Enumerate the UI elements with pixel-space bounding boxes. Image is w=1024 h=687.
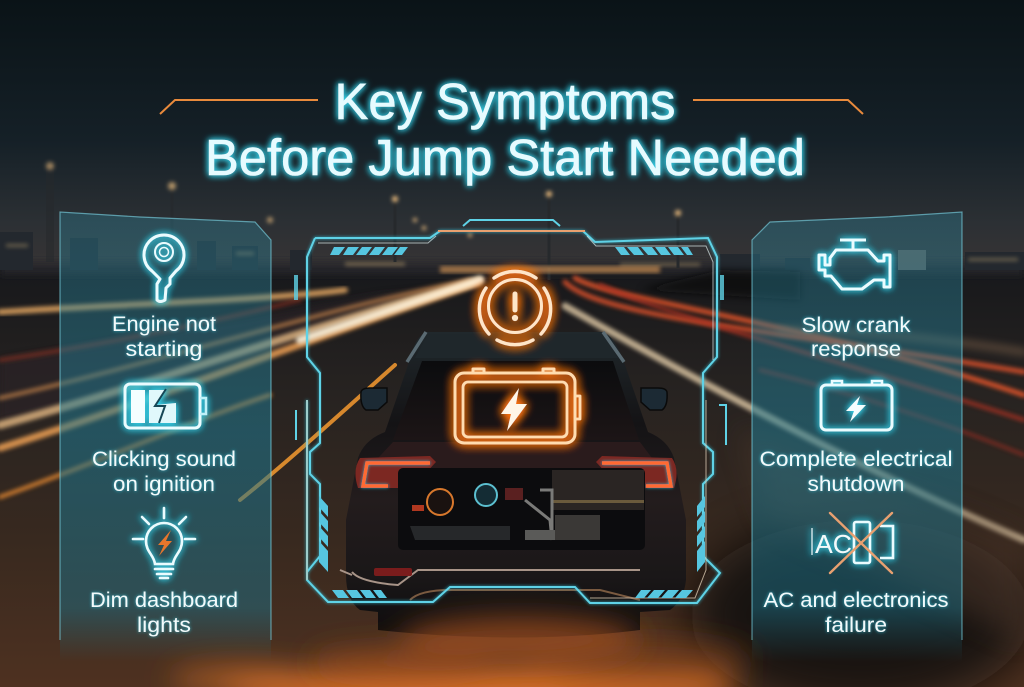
icon: warning circle [479,271,551,345]
label: engine not starting: Engine not [112,313,216,336]
icon: key [144,235,184,302]
label: AC and electronics failure: AC and electronics [764,589,948,612]
HUD frame around car [296,220,726,603]
title accent lines [160,100,863,114]
label: AC and electronics failure: failure [825,614,887,637]
frame hatch marks [319,247,705,598]
label: slow crank response: Slow crank [802,314,911,337]
label: engine not starting: starting [126,338,202,361]
label: dim dashboard lights: lights [137,614,191,637]
label: complete electrical shutdown: shutdown [808,473,904,496]
smoke: orange dust on road [170,638,750,687]
label: complete electrical shutdown: Complete electrical [760,448,952,471]
label: dim dashboard lights: Dim dashboard [90,589,238,612]
title text: Key Symptoms [334,73,676,130]
icon: low battery [125,384,206,428]
icon: dim light bulb [133,508,195,578]
label: slow crank response: response [811,338,901,361]
car: rear view of SUV [340,332,686,638]
icon: central battery [455,369,580,443]
icon: engine [819,240,890,289]
icon: AC crossed out: AC [815,529,852,559]
panel: right symptoms [752,212,962,662]
label: clicking sound on ignition: on ignition [113,473,215,496]
label: clicking sound on ignition: Clicking sound [92,448,236,471]
dashboard and engine bay [410,484,600,540]
panel: left symptoms [60,212,271,662]
title [160,73,863,186]
icon: AC crossed out [812,513,893,573]
icon: battery [821,381,892,430]
title text: Before Jump Start Needed [205,129,805,186]
smoke: dust in front of bumper [310,616,640,678]
